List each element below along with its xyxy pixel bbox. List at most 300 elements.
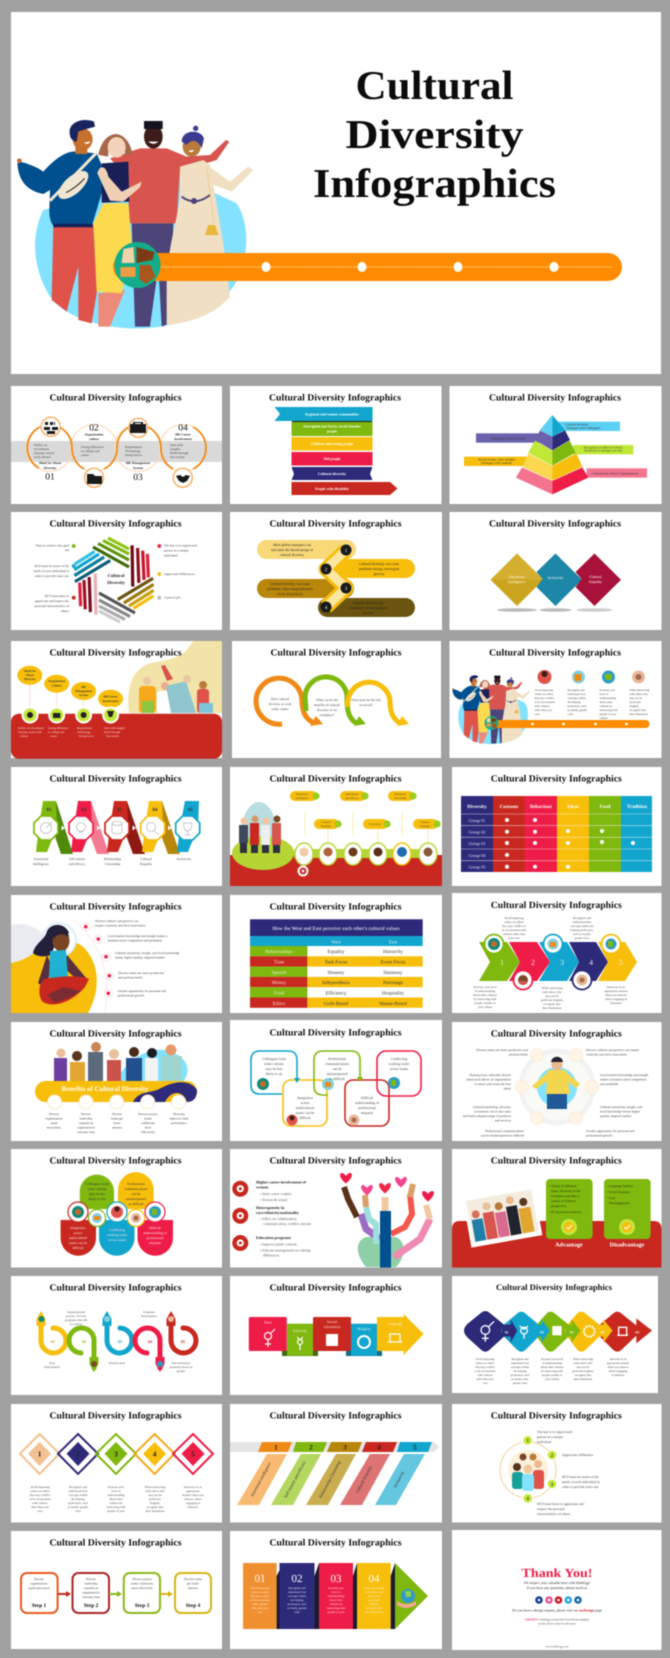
side notes and dots: HCP must learn to [45, 594, 69, 598]
card text: Disengagement [609, 1201, 630, 1205]
pyramid label bars: Cultural diversity [565, 423, 588, 426]
column notes [534, 688, 650, 720]
lower notes: by interacting with [474, 997, 497, 1001]
panel: slide 19 arches: teams can be [69, 1241, 87, 1245]
notes on red base: in college and [48, 730, 65, 734]
pill text: Most global managers can [273, 543, 311, 547]
section labels and notes: Build through [170, 451, 189, 455]
panel: slide 19 arches: across [74, 1231, 83, 1235]
panel: slide 21 advantage and disadvantage [452, 1149, 662, 1268]
column text: level of [332, 1590, 340, 1594]
ribbon numbers: 05 [188, 807, 194, 813]
timeline dots and notes [73, 919, 180, 1013]
column text: cultures by [109, 1501, 123, 1505]
column notes: Recognize and [568, 688, 585, 692]
panel: slide 6 three diamonds [450, 512, 662, 630]
column text: may not be [577, 1365, 590, 1369]
upper notes: values on others [504, 920, 525, 924]
main title: Infographics [313, 160, 556, 207]
node notes: The key is to regard each [537, 1430, 573, 1434]
ring numbers: 03 [118, 1339, 122, 1344]
table header [467, 804, 647, 810]
list text: Heterogeneity in [256, 1205, 285, 1210]
right notes: Greater opportunity for personal and [586, 1129, 635, 1133]
column text: recognize that [575, 1373, 591, 1377]
question text: Does cultural [271, 697, 289, 701]
column text: by interacting with [541, 1369, 563, 1373]
row labels: Group 05 [469, 864, 486, 870]
panel: slide 23 arrow blocks [230, 1276, 442, 1395]
pale dotted blob [11, 924, 49, 963]
section labels and notes: Organization [85, 432, 104, 436]
column text: own [483, 1381, 488, 1385]
table rows: Harmony [384, 970, 403, 976]
panel: slide 19 arches: Conflicting [109, 1228, 125, 1232]
column text: people outside of [542, 1373, 562, 1377]
table columns [461, 796, 652, 872]
slanted panels [237, 1454, 425, 1505]
chevron numbers: 3 [560, 958, 564, 967]
slanted panels: Emotional intelligence [250, 1461, 272, 1497]
panel: slide 3 pyramid [450, 386, 662, 504]
panel: slide 19 arches: multicultural [69, 1236, 87, 1240]
column text: concepts within [69, 1493, 88, 1497]
column text: of understanding [542, 1361, 562, 1365]
frame text: etiquette [361, 1111, 374, 1115]
slide title: Cultural Diversity Infographics [270, 902, 402, 912]
diamond numbers: 3 [114, 1450, 118, 1458]
pill text: process [363, 611, 374, 615]
yellow labels: Cultural [321, 821, 331, 824]
side notes and dots: Listen to pt's [164, 596, 182, 600]
panel: slide 26 slanted columns [230, 1404, 442, 1522]
section labels and notes: Mind Set About [39, 461, 62, 465]
panel: slide 12 diversity table [452, 767, 662, 886]
upper notes: Recognize and [573, 916, 591, 920]
red base [452, 1221, 662, 1268]
column text: own [258, 1610, 263, 1614]
yellow labels: Emotional [296, 793, 308, 796]
arch text: misinterpreted [126, 1197, 146, 1201]
right notes: Diverse cultures' perspective can inspire [586, 1048, 640, 1052]
diamond numbers [38, 1450, 195, 1458]
right notes: local knowledge means higher [600, 1110, 641, 1114]
card captions: Disadvantage [610, 1242, 645, 1248]
icon: hands badge [485, 716, 498, 730]
column text: English, [150, 1501, 160, 1505]
people in circle [508, 1450, 548, 1491]
slanted panels: Cultural Empathy [354, 1464, 373, 1494]
table dots [505, 818, 635, 869]
block labels: Sexual [327, 1320, 337, 1324]
thank you heading: Thank You! [522, 1566, 592, 1580]
column notes: proficient [630, 700, 641, 704]
arch text: some cultures [87, 1187, 107, 1191]
notes on red base: Succession [106, 734, 119, 738]
benefit text: more [145, 1126, 152, 1130]
frame text: across teams [390, 1067, 409, 1071]
timeline dots and notes: Diverse teams are more productive [118, 971, 165, 975]
side notes and dots: personal characteristics of [35, 604, 70, 608]
benefit text: organization's [77, 1126, 96, 1130]
lower notes: your culture [478, 1005, 493, 1009]
card text: • Language barriers [607, 1184, 634, 1188]
column notes: profession, such [568, 704, 587, 708]
section labels and notes: HR Management [126, 461, 151, 465]
side notes and dots: order to provide total care [35, 574, 70, 578]
column text: with cultures [252, 1602, 268, 1606]
slide title: Cultural Diversity Infographics [491, 901, 622, 911]
diamond icons and numbers: 03 [570, 1330, 574, 1334]
column text: people of your [328, 1610, 344, 1614]
panel: slide 16 benefits of cultural diversity [11, 1022, 222, 1141]
notes on red base: Staying current with [18, 730, 42, 734]
column notes: about other [600, 700, 613, 704]
numbered nodes: 4 [526, 1496, 529, 1502]
step text: leadership [84, 1582, 98, 1586]
column text: with others who [145, 1489, 165, 1493]
bubble labels: System [79, 693, 89, 697]
step text: get better [187, 1582, 200, 1586]
table rows: Independence [322, 980, 351, 986]
hexagon centre label [107, 573, 126, 585]
benefit text: spark [51, 1121, 58, 1125]
column text: profession, such [288, 1602, 307, 1606]
slide title: Cultural Diversity Infographics [489, 648, 621, 658]
group illustration [232, 802, 294, 870]
chevron numbers: 2 [531, 958, 535, 967]
diamond icons and numbers: 04 [601, 1330, 605, 1334]
column text: values on others [30, 1489, 51, 1493]
column text: profession, such [511, 1373, 530, 1377]
column text: Avoid imposing [30, 1485, 50, 1489]
column notes: Avoid imposing [534, 688, 554, 692]
benefit text: answers [112, 1126, 123, 1130]
ribbon numbers: 04 [152, 807, 158, 813]
numbered nodes: 2 [551, 1453, 554, 1459]
step text: answers [188, 1586, 199, 1590]
list text: differences [263, 1254, 280, 1258]
panel: slide 7 red band and stems [11, 641, 222, 759]
bubble labels: Involvement [103, 699, 119, 703]
hook captions: Identification [109, 1361, 126, 1365]
panel: slide 17 linked rounded frames [230, 1020, 442, 1141]
upper notes: cultures other than [503, 932, 526, 936]
table rows: Honesty [328, 970, 345, 976]
lower notes: proficient English, [541, 998, 563, 1002]
ribbon numbers: 01 [46, 807, 52, 813]
side notes and dots: HCP must be aware of the [34, 564, 70, 568]
frame text: misinterpreted [327, 1072, 348, 1076]
timeline dots and notes: Cultural sensitivity, insight, and local knowledge [115, 951, 180, 955]
hook captions: to content [70, 1322, 82, 1326]
panel: hero slide [11, 12, 661, 374]
column text: roles [75, 1509, 82, 1513]
lower notes: While interacting [542, 986, 563, 990]
node notes: HCP must learn to appreciate and [537, 1502, 584, 1506]
pale ring with six icons [516, 1048, 598, 1124]
column text: with cultures [477, 1373, 493, 1377]
slide title: Cultural Diversity Infographics [50, 902, 182, 912]
notes on red base: career [50, 734, 57, 738]
upper notes: your own [508, 936, 520, 940]
lower notes [473, 985, 628, 1010]
section labels and notes: Politics in [34, 443, 48, 447]
column numbers: 01 [254, 1573, 266, 1585]
column text: concepts within [511, 1365, 530, 1369]
ribbons [36, 801, 199, 854]
numbered tags [258, 1442, 432, 1452]
slide title: Cultural Diversity Infographics [50, 774, 182, 784]
left notes [463, 1048, 529, 1138]
table header: Ideas [567, 804, 579, 810]
slide title: Cultural Diversity Infographics [270, 1156, 402, 1166]
hexagon centre label: Diversity [107, 580, 126, 585]
thank you message [524, 1581, 590, 1590]
ribbon numbers: 02 [82, 807, 87, 813]
pyramid label bars: Social events, class insights [478, 458, 515, 462]
right notes: creativity and drive innovation [586, 1052, 627, 1056]
column text: appropriate manner [607, 1361, 629, 1365]
slide title: Cultural Diversity Infographics [496, 1282, 613, 1292]
credit notes [525, 1618, 590, 1626]
diamond labels: Inclusivity [548, 576, 564, 580]
column notes: or be inconsistent [534, 700, 555, 704]
section labels and notes: hiring forces [125, 453, 142, 457]
arch text: may be less [89, 1192, 106, 1196]
step text: expands an [84, 1586, 99, 1590]
cream blob [128, 641, 222, 713]
list text: Higher career involvement of [256, 1180, 307, 1184]
frame text: some cultures [264, 1062, 285, 1066]
yellow labels: Inclusivity [369, 823, 382, 826]
panel: slide 11 faces on red band [230, 767, 442, 886]
pill text: process [374, 572, 385, 576]
lower notes: of understanding [475, 989, 496, 993]
ribbon captions: Intelligence [33, 862, 49, 866]
slanted panels: Self esteem and efficacy [283, 1459, 307, 1499]
benefit text: organizations [45, 1116, 63, 1120]
column text: Recognize and [511, 1357, 529, 1361]
column text: values on others [476, 1361, 495, 1365]
numbered tags: 2 [309, 1444, 313, 1452]
blocks and arrow [249, 1314, 424, 1356]
ring numbers [51, 1339, 185, 1344]
section numbers: 04 [178, 424, 188, 434]
side notes and dots: individual [164, 554, 177, 558]
side notes and dots: others [61, 609, 70, 613]
card text: • Cost [607, 1196, 615, 1200]
column text: their limitations [574, 1377, 593, 1381]
step frames and connectors [21, 1573, 211, 1613]
section labels and notes: body abroad [34, 455, 51, 459]
table rows: Money [272, 980, 287, 986]
column notes: Increase your [600, 688, 615, 692]
column text: the helping [514, 1369, 527, 1373]
section labels and notes: Start with [170, 443, 183, 447]
section labels and notes: Staying current [34, 451, 54, 455]
question text [269, 697, 381, 717]
table header: East [389, 940, 398, 946]
column text: Increase your level [541, 1357, 563, 1361]
benefit circles [48, 1095, 185, 1109]
slide title: Cultural Diversity Infographics [50, 1030, 182, 1040]
benefit text: Diverse [49, 1112, 60, 1116]
column text: as family, gender [68, 1505, 88, 1509]
coloured arches [61, 1172, 173, 1256]
left notes: perform better [509, 1052, 529, 1056]
column text: When interacting [364, 1586, 385, 1590]
ribbon labels: Aboriginal and Torres strait islander [303, 424, 361, 428]
upper notes: gender roles [575, 936, 590, 940]
left notes: and services [495, 1118, 512, 1122]
pill text: articulate the disadvantage of [271, 548, 314, 552]
panel: slide 19 arches [11, 1149, 222, 1268]
step text: customer base [82, 1595, 101, 1599]
column text: When interacting [573, 1357, 594, 1361]
column text: understanding [108, 1493, 125, 1497]
step text: Diverse [34, 1577, 45, 1581]
hook captions: primarily based on [169, 1365, 193, 1369]
block labels: Religion [357, 1327, 371, 1331]
slide title: Cultural Diversity Infographics [50, 1412, 182, 1422]
yellow banner [35, 1081, 197, 1102]
column text: own [37, 1509, 43, 1513]
ribbon labels: Old people [323, 457, 341, 461]
pyramid label bars: Dialogue social activities [491, 437, 525, 440]
ribbon captions: Empathy [140, 862, 152, 866]
zigzag ribbon with numbered nodes: 3 [345, 586, 348, 592]
icons: people, folder, briefcase, handshake [44, 422, 190, 484]
step labels: Step 1 [32, 1603, 47, 1609]
thank you message: If you have any questions, please reach us [527, 1586, 588, 1590]
diamond labels: Functional [509, 575, 524, 579]
hero illustration: four diverse friends [17, 120, 253, 329]
panel: slide 5 zigzag pills [230, 512, 442, 630]
step text: Diverse [86, 1577, 97, 1581]
ribbon labels: Cultural diversity [318, 472, 346, 476]
thank you message: We respect your valuable hour with SlideEgg! [524, 1581, 590, 1585]
yellow labels: Empathy [420, 825, 431, 828]
column notes: level of [600, 692, 608, 696]
column text: Avoid imposing [251, 1586, 270, 1590]
woven striped hexagon [67, 538, 161, 622]
card text: variety of different [551, 1199, 576, 1203]
section labels and notes: Involvement [174, 437, 193, 441]
table rows: Guilt-Based [324, 1001, 349, 1007]
bubble labels [24, 669, 119, 703]
step labels: Step 2 [84, 1603, 99, 1609]
column notes: with cultures [534, 704, 550, 708]
frame text: Integration [297, 1096, 313, 1100]
pill text: occur of practices [277, 592, 303, 596]
rounded frames [251, 1051, 421, 1126]
list text: • Improve public schools [260, 1242, 297, 1246]
timeline dots and notes: means higher quality, targeted market [115, 956, 165, 960]
table rows: Equality [328, 949, 345, 955]
panel: slide 19 arches: understanding of [143, 1231, 168, 1235]
column text: that may conflict [30, 1493, 50, 1497]
slide title: Cultural Diversity Infographics [491, 1412, 622, 1422]
panel: slide 19 arches: Integration [70, 1226, 86, 1230]
arch text: communications [124, 1187, 148, 1191]
table header: Tradition [627, 804, 647, 810]
hook captions: Participation [44, 1365, 60, 1369]
bubble labels: Culture [52, 684, 62, 688]
node notes: needs of each individual in [562, 1480, 600, 1484]
hook captions: Discrimination [172, 1361, 191, 1365]
yellow labels: Relational [394, 793, 406, 796]
column text: Increase your [328, 1586, 344, 1590]
upper notes: such as family, [573, 932, 591, 936]
ribbon numbers: 03 [117, 807, 122, 813]
question text: diversity at my [317, 708, 337, 712]
side notes and dots [33, 544, 198, 613]
panel: slide 18 man and icon ring [452, 1022, 662, 1141]
column notes: understand four [568, 692, 586, 696]
card captions [555, 1242, 645, 1248]
left notes: Professional communications [485, 1129, 525, 1133]
orange timeline bar [113, 253, 622, 281]
design request line: Do you have a design request, please visit our myDesign page [512, 1608, 602, 1612]
slanted panels: Inclusivity [392, 1469, 406, 1488]
list text: race/ethnicity/nationality [256, 1210, 299, 1215]
zigzag ribbon with numbered nodes: 1 [345, 548, 348, 554]
right notes: and profitable [600, 1082, 619, 1086]
frame text: communications [325, 1062, 349, 1066]
step text: Diverse project [132, 1577, 152, 1581]
section labels and notes: Requirement [125, 445, 142, 449]
pill text [267, 543, 399, 615]
arch text: Professional [127, 1182, 145, 1186]
slide title: Cultural Diversity Infographics [269, 394, 401, 404]
ribbon numbers [46, 807, 194, 813]
column text: their limitations [365, 1610, 384, 1614]
card text: • Variety of different [549, 1184, 576, 1188]
numbered nodes [523, 1436, 557, 1503]
notes on red base: Politics in recruitment [18, 726, 44, 730]
list text: • Educate management on valuing [260, 1248, 311, 1252]
section labels and notes: Succession [170, 455, 185, 459]
lower notes: Increase your level [474, 985, 497, 989]
column text: other than your [251, 1606, 269, 1610]
slide title: Cultural Diversity Infographics [50, 1538, 182, 1548]
list text: • Dual career couples [260, 1192, 292, 1196]
column text: the helping [71, 1497, 85, 1501]
diamond labels: Cultural [589, 575, 602, 579]
hook pins [36, 1311, 176, 1372]
illustration: meditating woman [33, 923, 89, 1004]
step labels: Step 4 [186, 1603, 201, 1609]
column text: as family roles, [511, 1377, 529, 1381]
table header [250, 919, 423, 946]
question text: diversity at work [269, 702, 292, 706]
upper notes: concepts within the [570, 924, 594, 928]
benefit text: Diverse [112, 1112, 123, 1116]
zigzag ribbon with numbered nodes [320, 544, 352, 612]
yellow labels: Empathy [321, 825, 332, 828]
column text: with others who [574, 1361, 593, 1365]
chevron arrows [479, 942, 637, 981]
column numbers: 04 [368, 1573, 380, 1585]
frame text: Difficult [361, 1096, 373, 1100]
question text: involved? [359, 703, 373, 707]
step text: teams collaborate [131, 1582, 154, 1586]
red band [230, 855, 442, 886]
node notes: Appreciate Difference [562, 1453, 594, 1457]
ring numbers: 01 [51, 1339, 55, 1344]
white pointers between badges [62, 826, 172, 830]
